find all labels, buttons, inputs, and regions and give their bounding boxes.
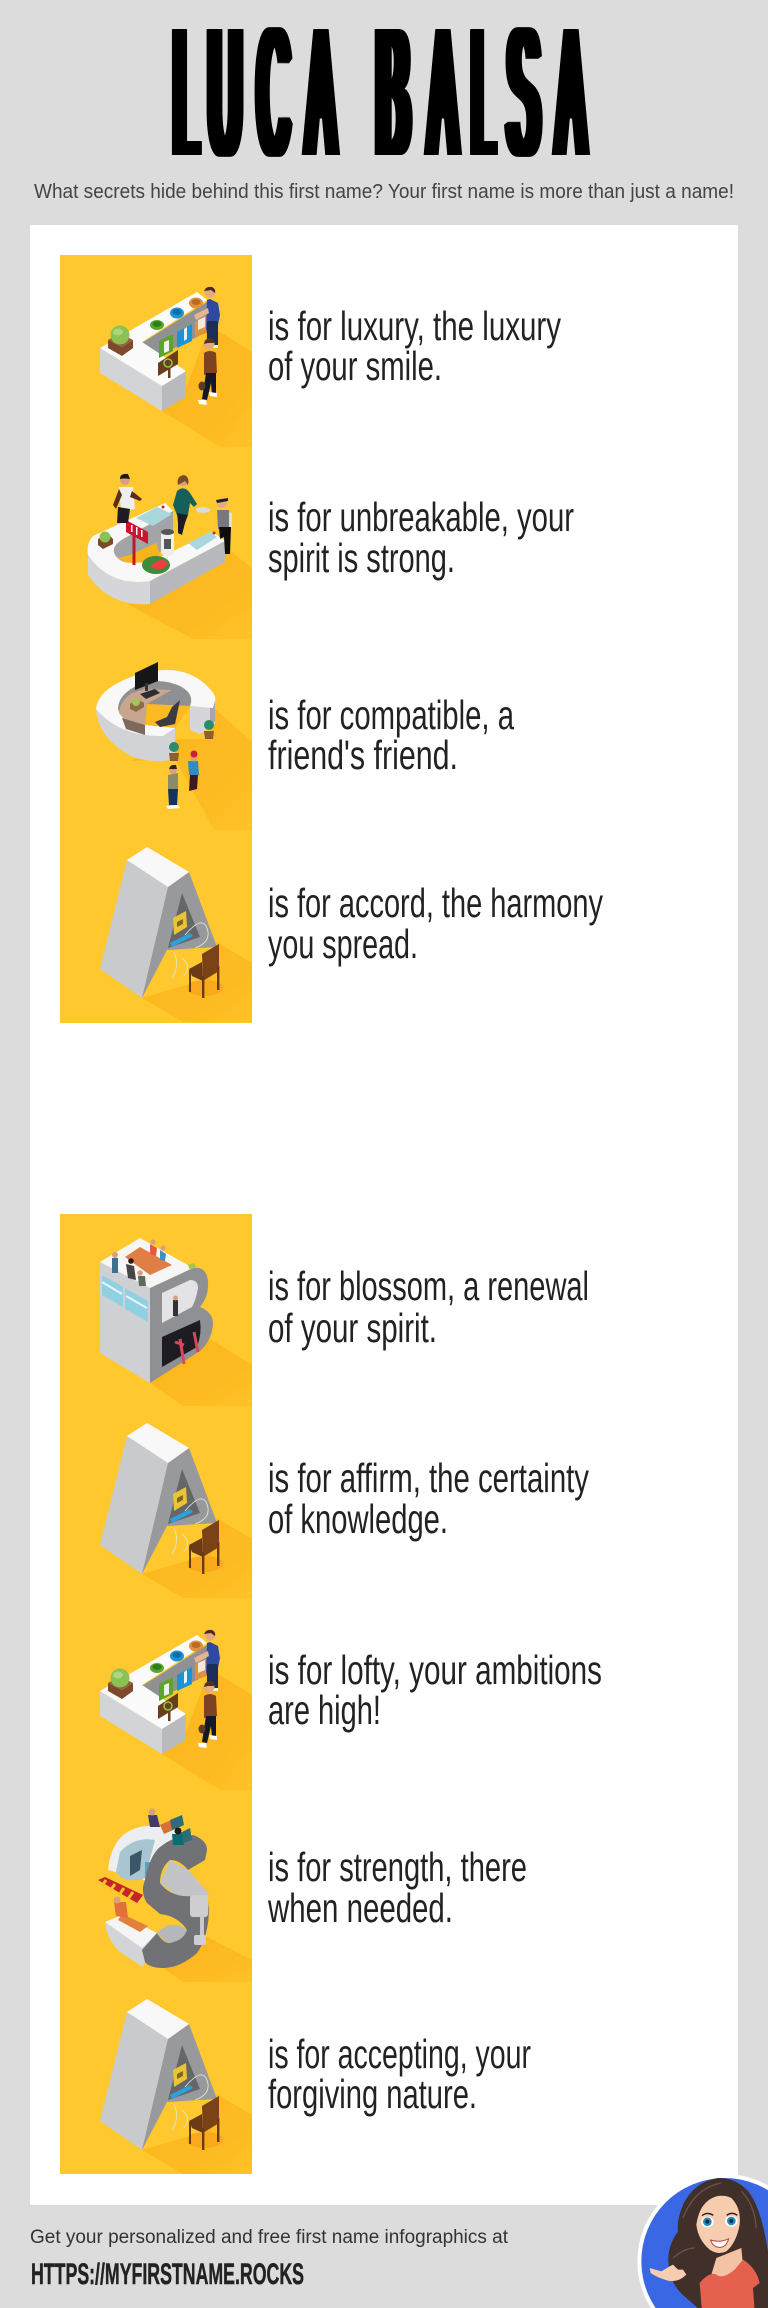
icon: isometric letter L — [60, 1598, 252, 1790]
text: lofty: are high! — [268, 1687, 381, 1733]
text: luxury: of your smile. — [268, 343, 442, 389]
text: blossom: of your spirit. — [268, 1305, 437, 1351]
row: letter U, unbreakable — [60, 447, 574, 639]
avatar: cartoon woman in blue circle — [637, 2174, 768, 2308]
text: accepting: is for accepting, your — [268, 2031, 531, 2077]
row: letter A, affirm — [60, 1406, 589, 1598]
icon: isometric letter U — [60, 447, 252, 639]
text: strength: is for strength, there — [268, 1844, 527, 1890]
row: letter S, strength — [60, 1790, 527, 1982]
text: accord: you spread. — [268, 921, 418, 967]
white content panel — [30, 225, 738, 2205]
text: accepting: forgiving nature. — [268, 2071, 477, 2117]
text: compatible: is for compatible, a — [268, 692, 514, 738]
icon: isometric letter L — [60, 255, 252, 447]
row: letter B, blossom — [60, 1214, 589, 1406]
row: letter L, lofty — [60, 1598, 602, 1790]
text: luxury: is for luxury, the luxury — [268, 303, 561, 349]
icon: isometric letter A — [60, 1982, 252, 2174]
text: accord: is for accord, the harmony — [268, 880, 603, 926]
footer url: HTTPS://MYFIRSTNAME.ROCKS — [31, 2258, 304, 2291]
row: letter L, luxury — [60, 255, 561, 447]
icon: isometric letter A — [60, 1406, 252, 1598]
icon: isometric letter S — [60, 1790, 252, 1982]
text: strength: when needed. — [267, 1885, 453, 1931]
text: lofty: is for lofty, your ambitions — [268, 1647, 602, 1693]
subtitle: What secrets hide behind this first name? Your first name is more than just a name! — [34, 181, 734, 203]
row: letter C, compatible — [60, 639, 514, 831]
text: compatible: friend's friend. — [268, 732, 458, 778]
icon: isometric letter B — [60, 1214, 252, 1406]
footer prompt text: Get your personalized and free first name infographics at — [30, 2227, 509, 2248]
text: unbreakable: is for unbreakable, your — [268, 494, 574, 540]
text: affirm: is for affirm, the certainty — [268, 1455, 589, 1501]
text: unbreakable: spirit is strong. — [268, 535, 455, 581]
text: affirm: of knowledge. — [268, 1496, 448, 1542]
icon: isometric letter C — [60, 639, 252, 830]
icon: isometric letter A — [60, 830, 252, 1023]
row: letter A, accord — [60, 830, 603, 1023]
text: blossom: is for blossom, a renewal — [268, 1263, 589, 1309]
title — [172, 0, 590, 194]
row: letter A, accepting — [60, 1982, 531, 2174]
